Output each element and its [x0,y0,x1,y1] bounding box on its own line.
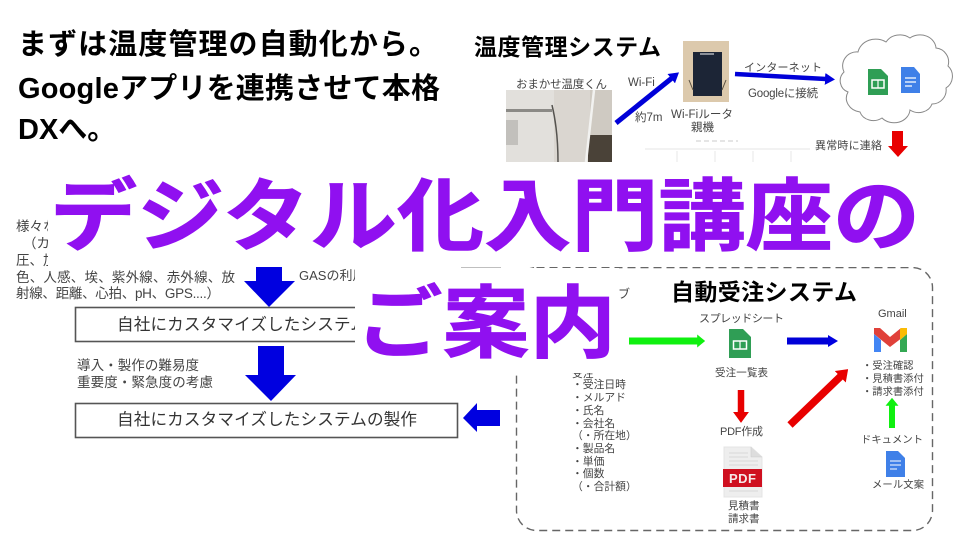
mask: title background upper [48,162,960,267]
title: ご案内 [356,279,616,368]
label: GAS: GASの利用 [299,268,365,283]
heading: intro text: Googleアプリを連携させて本格 [18,72,440,105]
arrow: blue to Gmail [787,338,829,344]
order list: ・氏名 [572,403,604,417]
box: customized system 1: 自社にカスタマイズしたシステムの製作 [117,315,417,334]
label: considerations: 重要度・緊急度の考慮 [77,375,213,390]
sensor list: 色、人感、埃、紫外線、赤外線、放 [16,269,236,285]
order list: ・メルアド [572,392,626,404]
sensor list: 圧、加速度 [16,253,84,268]
icon: PDF [723,447,762,497]
heading: intro text: DXへ。 [18,114,116,146]
arrow: red down [738,390,744,413]
heading: intro text: まずは温度管理の自動化から。 [18,28,438,61]
mask: title background lower [355,268,619,373]
Gmail bullet list: ・見積書添付 [862,372,924,385]
title [50,172,920,368]
arrow: red diagonal [790,376,841,425]
Gmail bullet list [862,359,924,398]
label: distance: 約7m [635,110,662,124]
label: router: 親機 [691,121,714,134]
box: customized system 1 [76,308,476,342]
line fragment above mask [461,266,501,268]
sensor list: （カメラ [23,236,77,251]
label: Wi-Fi: Wi-Fi [628,77,655,89]
panel: automatic order system [516,268,932,530]
label: internet: インターネット [744,61,822,74]
icon: PDF: PDF [729,471,756,486]
arrow: left [463,403,500,432]
label: estimate and invoice: 見積書 [728,499,760,512]
panel: temperature management system [474,34,952,162]
icon: document [886,451,905,477]
arrow: internet link [735,74,826,79]
label: mail text: メール文案 [872,478,924,491]
sensor list [16,219,236,301]
fragment: form label: ブ [618,286,630,301]
label: document: ドキュメント [861,435,923,446]
order list: ・製品名 [572,441,615,455]
cloud with Google icons [840,35,952,123]
sensor list: 射線、距離、心拍、pH、GPS....） [16,286,220,301]
label: order list: 受注一覧表 [715,366,768,379]
icon: Gmail [874,328,907,352]
arrow: green to spreadsheet [629,338,698,344]
heading: intro text [18,28,440,146]
order list: ・会社名 [572,416,615,430]
arrow: down 1 [244,267,295,307]
label: considerations [77,358,213,390]
label: Google connection: Googleに接続 [748,86,818,100]
label: estimate and invoice [728,499,760,525]
title: デジタル化入門講座の [50,172,920,261]
icon: document [901,67,920,93]
icon: spreadsheet [868,69,888,95]
order list [572,367,637,493]
heading: automatic order: 自動受注システム [671,279,857,305]
order list: ・個数 [572,467,605,480]
Gmail bullet list: ・受注確認 [862,359,914,372]
order list: （・所在地） [572,429,637,442]
panel: left flow [16,219,500,438]
box: customized system 2 [76,404,458,438]
label: PDF creation: PDF作成 [720,425,763,438]
Gmail bullet list: ・請求書添付 [862,385,924,398]
photo: Wi-Fi router [683,41,729,102]
label: considerations: 導入・製作の難易度 [77,358,199,373]
arrow: Wi-Fi link [616,78,672,123]
order list: 受注 [572,367,594,380]
label: router [671,108,733,134]
label: spreadsheet: スプレッドシート [699,312,784,325]
label: estimate and invoice: 請求書 [728,512,760,525]
chart fragment [645,141,810,162]
order list: （・合計額） [572,479,637,493]
panel: automatic order system contents [618,279,924,525]
order list: ・単価 [572,454,605,468]
arrow: green up [889,405,895,428]
label: sensor: おまかせ温度くん [516,77,607,91]
sensor list: 様々な [16,219,56,234]
heading: temperature system: 温度管理システム [474,34,661,60]
order list: ・受注日時 [572,378,626,391]
box: customized system 2: 自社にカスタマイズしたシステムの製作 [117,410,417,429]
label: alert contact: 異常時に連絡 [815,138,882,152]
arrow: down 2 [245,346,296,401]
arrow: alert [888,131,908,157]
photo: refrigerator [506,90,612,162]
label: Gmail: Gmail [878,308,907,320]
icon: spreadsheet [729,329,751,358]
label: router: Wi-Fiルータ [671,108,733,121]
